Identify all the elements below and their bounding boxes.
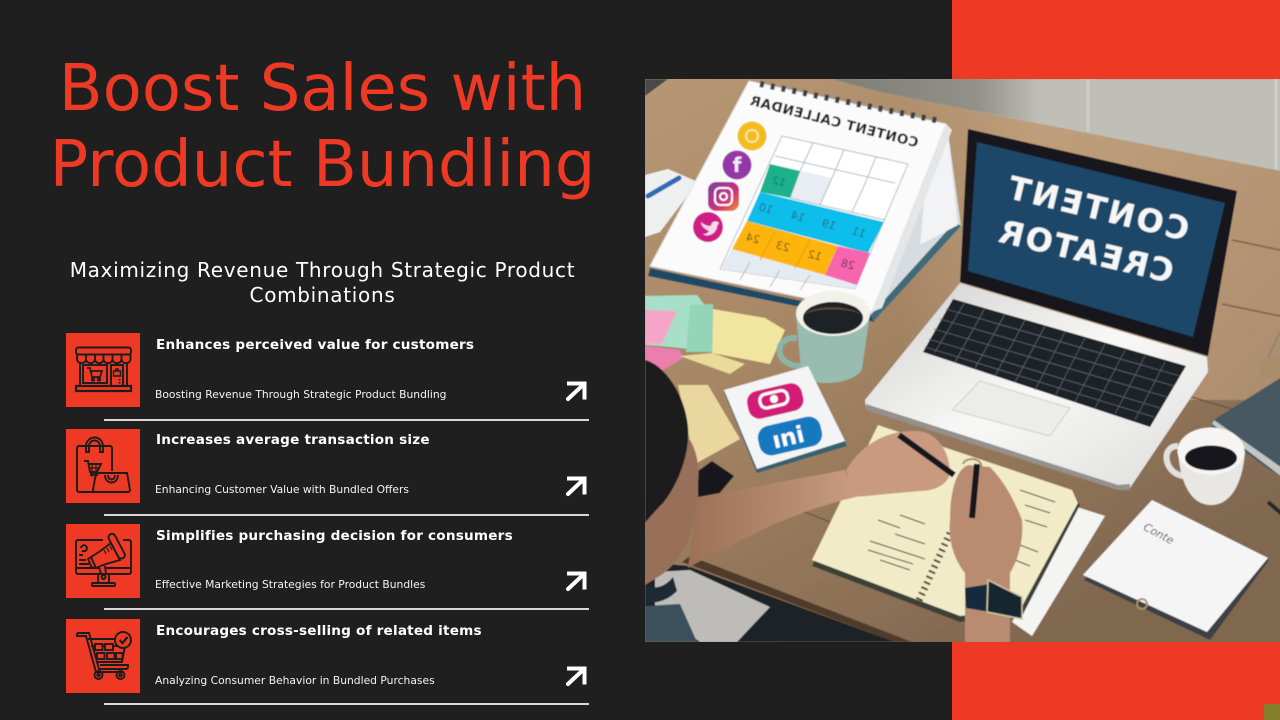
- icon: megaphone on monitor: [66, 524, 140, 598]
- arrow 1: [566, 382, 586, 402]
- laptop screen: [960, 129, 1237, 356]
- pen on right edge: [1268, 502, 1280, 514]
- calendar page: 11: [850, 225, 867, 241]
- plank seams: [775, 240, 1280, 590]
- list item 1: [66, 333, 589, 421]
- arrow 4: [566, 666, 586, 686]
- list item 4: [66, 619, 589, 705]
- subtitle: [70, 258, 575, 307]
- white coffee cup: [1167, 428, 1245, 505]
- calendar stand back: [860, 124, 961, 320]
- laptop screen: CREATOR: [994, 212, 1177, 291]
- floor under the table: [645, 562, 895, 642]
- binding rings: [760, 84, 940, 121]
- item 3 heading: Simplifies purchasing decision for consumers: [156, 528, 513, 544]
- screen text: CONTENT: [1002, 168, 1193, 249]
- calendar grid: [720, 136, 908, 289]
- calendar social icons: f: [733, 153, 742, 177]
- title: Product Bundling: [50, 128, 595, 202]
- right notepad: [1083, 500, 1269, 640]
- icon: shopping cart with check: [66, 619, 140, 693]
- subtitle: Combinations: [250, 283, 395, 307]
- item 1 heading: Enhances perceived value for customers: [156, 337, 474, 353]
- main notebook: [812, 425, 1105, 636]
- mint coffee mug: [779, 291, 870, 383]
- title: [50, 52, 595, 202]
- item 4 heading: Encourages cross-selling of related items: [156, 623, 482, 639]
- icon: storefront: [66, 333, 140, 407]
- calendar page: 24: [744, 231, 761, 247]
- social media tablet: ıni: [770, 422, 807, 454]
- red block bottom right: [952, 642, 1280, 720]
- item 2 heading: Increases average transaction size: [156, 432, 430, 448]
- calendar page: 23: [774, 239, 791, 255]
- yellow paper under hair: [678, 385, 740, 464]
- social media tablet: [724, 366, 847, 473]
- small olive corner square: [1264, 704, 1280, 720]
- laptop base: [865, 283, 1208, 490]
- right notepad: Conte: [1141, 521, 1176, 547]
- touchpad: [952, 381, 1070, 436]
- calendar social icons: [693, 122, 766, 242]
- calendar page: 28: [839, 257, 856, 273]
- list item 2: [66, 429, 589, 516]
- wall behind table: [832, 79, 1280, 172]
- calendar page: 12: [770, 174, 787, 190]
- wood table: [640, 75, 1280, 647]
- calendar page: 10: [757, 201, 774, 217]
- item 3 description: Effective Marketing Strategies for Product Bundles: [155, 578, 425, 591]
- item 2 description: Enhancing Customer Value with Bundled Offers: [155, 483, 409, 496]
- calendar page: 19: [820, 217, 837, 233]
- calendar page: 12: [806, 248, 823, 264]
- title: Boost Sales with: [59, 52, 586, 126]
- arrow 3: [566, 572, 586, 592]
- keyboard: [923, 299, 1186, 427]
- pen tray: [645, 169, 698, 237]
- photo: content creator desk scene: [645, 79, 1280, 642]
- subtitle: Maximizing Revenue Through Strategic Product: [70, 258, 575, 282]
- calendar title: CONTENT CALLENDAR: [748, 93, 920, 151]
- phone: [698, 461, 734, 497]
- icon: shopping bags: [66, 429, 140, 503]
- item 4 description: Analyzing Consumer Behavior in Bundled Purchases: [155, 674, 435, 687]
- person with arm and hands: [645, 360, 1022, 642]
- arrow 2: [566, 476, 586, 496]
- calendar page: 14: [789, 209, 806, 225]
- list item 3: [66, 524, 589, 610]
- red block top right: [952, 0, 1280, 79]
- calendar page: [648, 81, 952, 322]
- dark notebook at right: [1212, 332, 1280, 479]
- item 1 description: Boosting Revenue Through Strategic Product Bundling: [155, 388, 446, 401]
- sticky notes: [645, 295, 785, 375]
